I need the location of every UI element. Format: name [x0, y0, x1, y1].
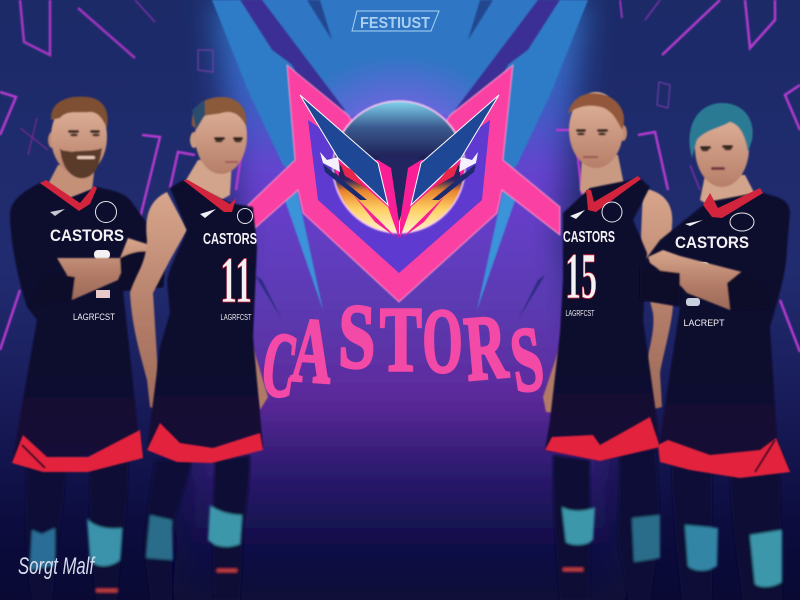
jersey — [545, 178, 658, 460]
shorts trim — [12, 430, 143, 472]
collar — [586, 176, 641, 212]
jersey lettering: LACREPT — [684, 318, 725, 328]
wordmark: CASTORS: S — [338, 287, 376, 388]
right feather details — [432, 152, 478, 200]
neck and head — [186, 97, 247, 205]
right dark wing — [411, 95, 499, 205]
wordmark: CASTORS: A — [289, 299, 336, 403]
sphere — [333, 101, 465, 233]
jersey lettering — [200, 208, 257, 322]
left pink band — [335, 157, 399, 238]
collar — [703, 188, 763, 218]
wordmark: CASTORS — [256, 287, 549, 418]
left feather details — [320, 152, 367, 200]
player 1 — [10, 97, 165, 600]
jersey — [640, 192, 790, 470]
player 4 — [640, 103, 790, 600]
right pink band — [400, 157, 464, 238]
jersey lettering — [50, 202, 124, 322]
jersey lettering: CASTORS — [50, 227, 124, 245]
legs — [553, 445, 660, 600]
jersey lettering: CASTORS — [203, 231, 257, 248]
emblem pink frame — [248, 65, 560, 302]
jersey number fragment — [686, 262, 710, 306]
player 3 — [543, 92, 674, 600]
background blue shards — [212, 0, 588, 320]
jersey lettering — [675, 213, 754, 328]
signature: Sorgt Malf — [18, 553, 96, 580]
emblem — [248, 65, 560, 302]
shorts trim — [147, 423, 263, 463]
wordmark: CASTORS: R — [461, 295, 511, 400]
jersey lettering: CASTORS — [563, 229, 615, 246]
player 2 — [130, 97, 268, 600]
collar — [183, 180, 236, 212]
neck and head — [689, 103, 758, 215]
jersey lettering: 15 — [565, 240, 597, 313]
legs — [26, 460, 128, 600]
shorts trim — [545, 417, 660, 461]
jersey lettering: 11 — [220, 244, 252, 317]
crossed arms — [640, 250, 770, 310]
jersey lettering: LAGRFCST — [220, 313, 252, 322]
neon line decorations — [0, 0, 800, 352]
arms — [543, 188, 674, 413]
wordmark: CASTORS: S — [505, 307, 549, 412]
legs — [672, 465, 782, 600]
legs — [144, 455, 250, 600]
crossed arms — [27, 238, 165, 307]
wordmark: CASTORS: C — [256, 312, 303, 418]
wordmark: CASTORS: T — [380, 289, 422, 391]
jersey — [147, 180, 263, 463]
jersey lettering — [563, 202, 622, 318]
brand tag: FESTIUST: FESTIUST — [360, 15, 430, 32]
left dark wing — [300, 95, 388, 205]
sphere dark centre — [378, 155, 420, 222]
neck and head — [46, 97, 108, 198]
jersey number fragment — [94, 250, 110, 298]
jersey — [10, 183, 165, 463]
wordmark: CASTORS: O — [422, 291, 463, 393]
emblem inner panel — [308, 120, 490, 273]
collar — [40, 180, 97, 211]
jersey lettering: LAGRFCST — [73, 312, 115, 322]
arms — [130, 192, 268, 417]
shorts trim — [658, 438, 790, 478]
jersey lettering: CASTORS — [675, 234, 749, 252]
neck and head — [568, 92, 627, 205]
jersey lettering: LAGRFCST — [566, 309, 595, 318]
brand tag: FESTIUST — [352, 11, 439, 32]
